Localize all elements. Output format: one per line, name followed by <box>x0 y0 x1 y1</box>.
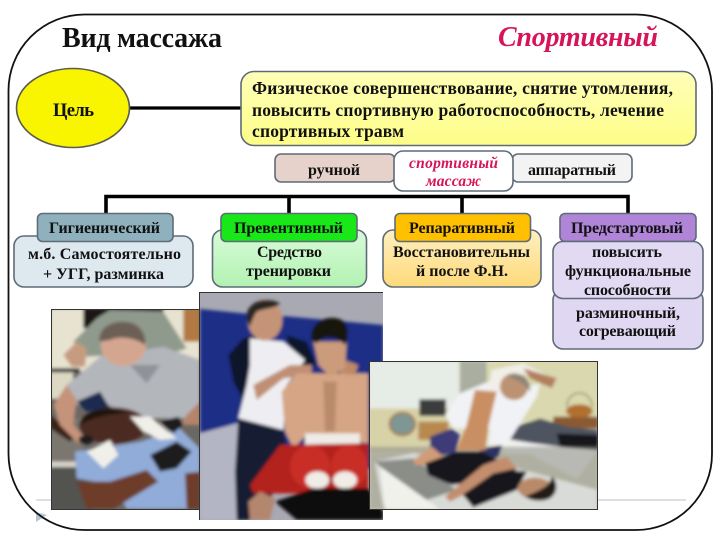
panel: pre-start: разминочный, <box>576 305 680 322</box>
goal description box <box>241 72 696 146</box>
panel: pre-start: согревающий <box>579 323 676 340</box>
photo: leg stretching on massage table <box>369 361 599 510</box>
goal ellipse: Цель <box>53 101 94 121</box>
connector: goal to description <box>130 106 242 110</box>
center label: sports massage <box>394 151 513 191</box>
panel: reparative: й после Ф.Н. <box>416 263 508 280</box>
panel: hygienic <box>14 214 193 287</box>
panel: preventive: Средство <box>257 244 322 261</box>
goal description box: повысить спортивную работоспособность, лечение <box>252 100 664 120</box>
icon: footer triangle <box>36 512 47 522</box>
panel: hygienic: + УГГ, разминка <box>43 266 164 283</box>
subtitle: massage type: Спортивный <box>498 22 658 53</box>
photo: coach massaging boxer's shoulders <box>199 292 384 520</box>
panel: hygienic: м.б. Самостоятельно <box>28 246 181 263</box>
panel: reparative: Репаративный <box>409 220 515 237</box>
title: Вид массажа <box>62 23 222 54</box>
method: manual <box>275 154 395 182</box>
goal description box: Физическое совершенствование, снятие утомления, <box>252 78 673 98</box>
panel: pre-start: Предстартовый <box>571 220 683 237</box>
panel: pre-start: функциональные <box>565 263 691 280</box>
panel: preventive: Превентивный <box>234 220 343 237</box>
panel: pre-start: повысить <box>592 244 663 261</box>
panel: pre-start <box>553 214 703 349</box>
panel: hygienic: Гигиенический <box>49 220 160 237</box>
goal ellipse <box>16 68 130 148</box>
center label: sports massage: массаж <box>425 173 481 190</box>
tree connector <box>106 196 628 213</box>
center label: sports massage: спортивный <box>409 155 498 172</box>
panel: preventive: тренировки <box>246 263 331 280</box>
panel: pre-start: способности <box>584 282 671 299</box>
footer line decoration <box>36 499 686 501</box>
panel: reparative: Восстановительны <box>393 244 530 261</box>
method: manual: ручной <box>308 162 360 179</box>
method: apparatus <box>512 154 632 182</box>
panel: reparative <box>383 214 541 287</box>
goal description box: спортивных травм <box>252 121 404 141</box>
method: apparatus: аппаратный <box>528 162 616 179</box>
panel: preventive <box>212 214 366 287</box>
photo: massage of athlete lying back <box>50 308 200 510</box>
